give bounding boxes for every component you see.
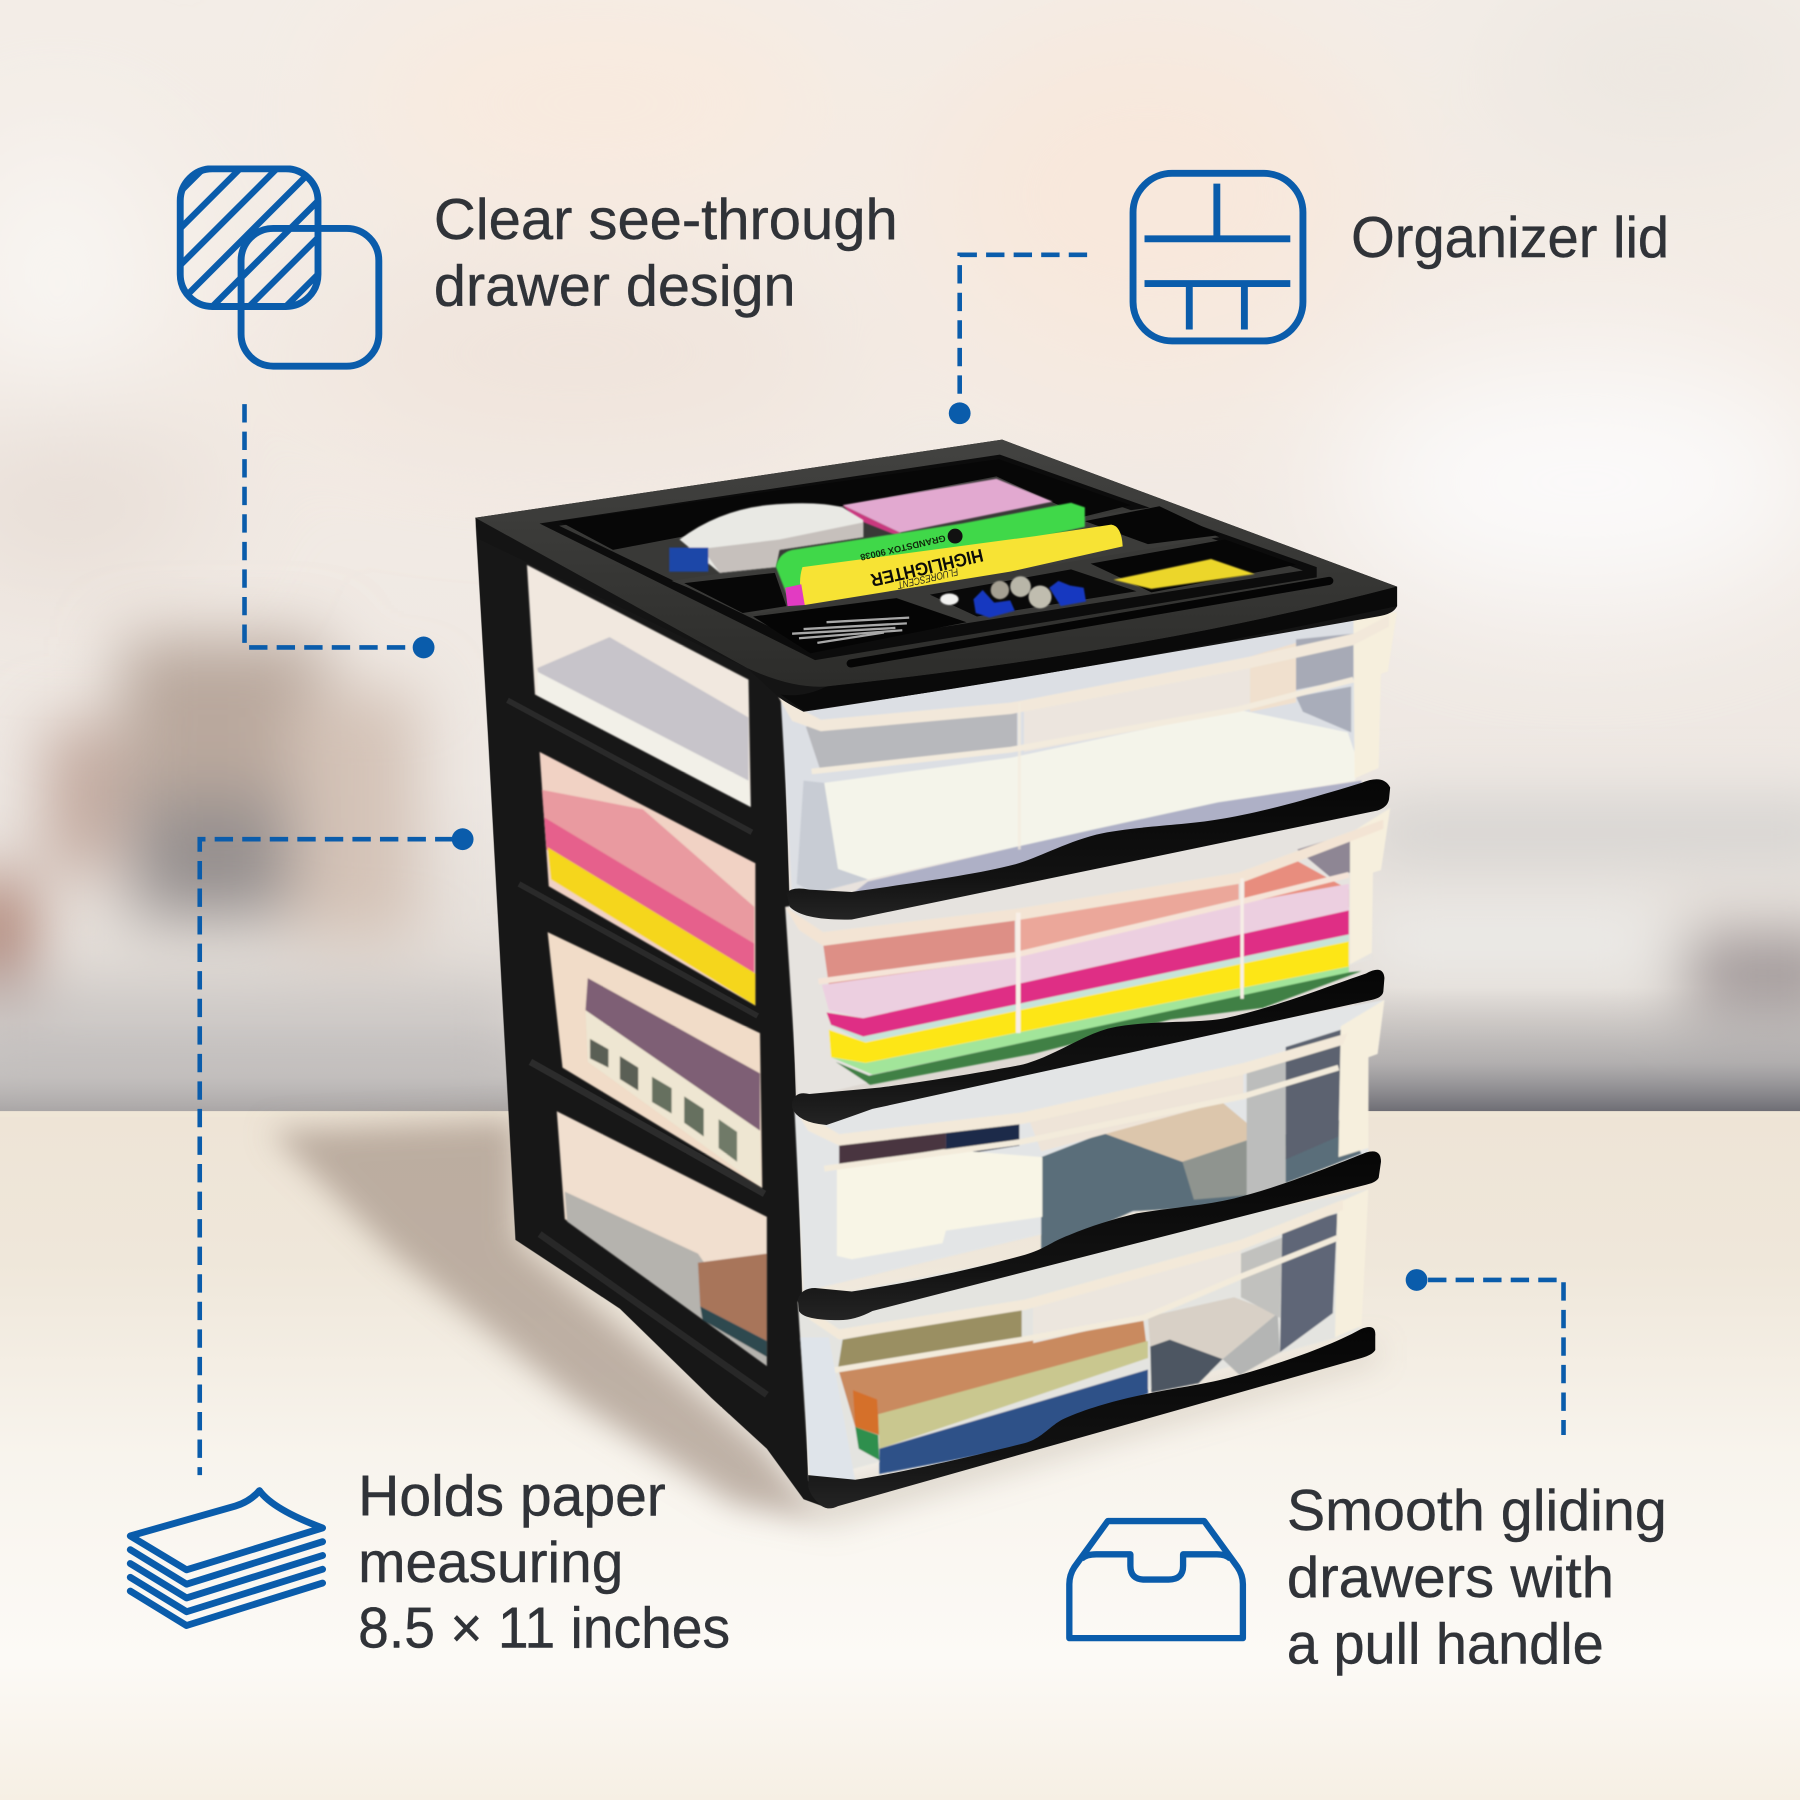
- side window 1: [527, 565, 751, 807]
- drawer 4 with files: [798, 1189, 1368, 1481]
- connector: [245, 404, 435, 658]
- connector: [200, 828, 474, 1475]
- green highlighter: [776, 503, 1085, 593]
- background: blurred room: [0, 0, 1800, 1114]
- connector: [1406, 1269, 1564, 1435]
- lid tray: [540, 455, 1329, 664]
- label: Smooth gliding: [1287, 1479, 1667, 1543]
- yellow sticky note: [1114, 559, 1255, 589]
- tape dispenser: [669, 503, 863, 573]
- yellow highlighter with label: HIGHLIGHTER: [869, 545, 985, 591]
- pink sticky notes: [843, 479, 1053, 540]
- yellow highlighter with label: [800, 525, 1123, 605]
- side window 2: [540, 752, 755, 1006]
- organizer lid: [475, 440, 1397, 712]
- label: Clear see-through: [434, 188, 898, 252]
- side frame: [475, 518, 829, 1508]
- paper clips: [792, 618, 909, 643]
- icon: drawer: [1069, 1521, 1243, 1638]
- callout: paper size: [130, 828, 730, 1660]
- callout: smooth gliding: drawers with: [1287, 1546, 1614, 1610]
- drawer unit product photo: [475, 440, 1397, 1508]
- callout: smooth gliding: a pull handle: [1287, 1612, 1604, 1676]
- base: [808, 1327, 1375, 1508]
- icon: overlapping squares: [25, 161, 432, 366]
- yellow highlighter with label: GRANDSTOX 90038: [859, 533, 947, 562]
- pink highlighter tip: [785, 584, 805, 606]
- callout: smooth gliding: [1069, 1269, 1667, 1676]
- yellow highlighter with label: FLUORESCENT: [896, 565, 959, 590]
- drawer 1 with white paper: [778, 612, 1397, 895]
- icon: paper stack: [130, 1491, 323, 1626]
- drawer band 2: [792, 970, 1384, 1125]
- callout: clear see-through: [25, 161, 898, 658]
- drawer 3 with tape rolls: [794, 1000, 1384, 1291]
- table surface: [0, 1111, 1800, 1800]
- callout: organizer lid: [949, 173, 1669, 424]
- callout: clear see-through: drawer design: [434, 254, 796, 318]
- side window 4: [557, 1111, 767, 1366]
- drawer band 1: [786, 779, 1390, 920]
- side window 3: [548, 932, 762, 1188]
- callout: paper size: 8.5 × 11 inches: [358, 1596, 730, 1660]
- label: Organizer lid: [1351, 206, 1669, 270]
- blue push pins: [940, 576, 1086, 618]
- callout: paper size: measuring: [358, 1531, 623, 1595]
- cabinet shadow on table: [270, 1119, 1378, 1527]
- drawer 2 with coloured paper: [785, 808, 1390, 1100]
- icon: compartment lid: [1133, 173, 1303, 341]
- connector: [949, 255, 1087, 424]
- label: Holds paper: [358, 1464, 666, 1528]
- drawer band 3: [798, 1151, 1381, 1320]
